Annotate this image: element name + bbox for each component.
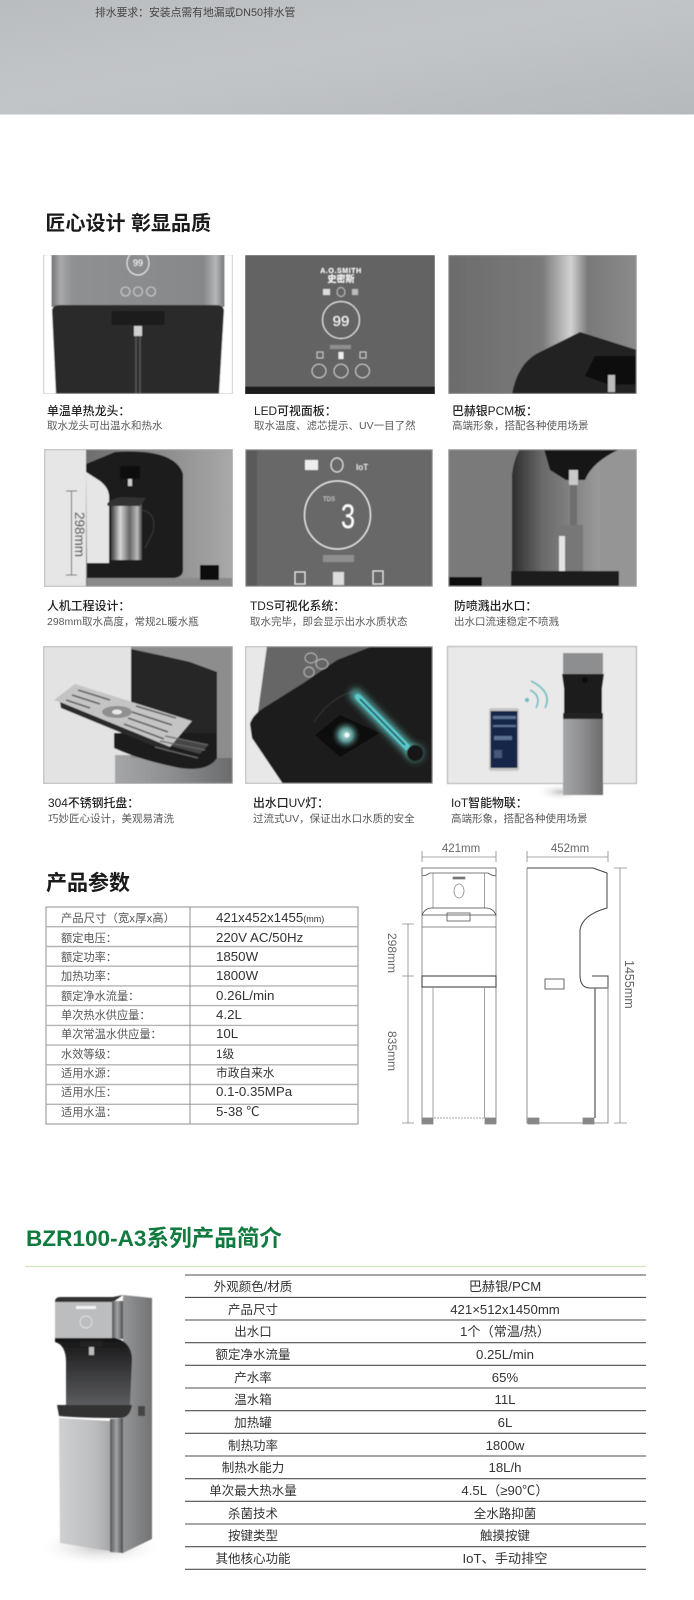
panel: LED display — [245, 255, 435, 394]
label: IoT: 高端形象，搭配各种使用场景 — [451, 812, 588, 825]
table: product parameters: 0.1-0.35MPa — [216, 1084, 293, 1099]
table: product parameters: 0.26L/min — [216, 988, 274, 1003]
label: ergonomic design: 298mm取水高度，常规2L暖水瓶 — [47, 615, 199, 628]
label: ergonomic design: 人机工程设计： — [47, 599, 130, 613]
table: series specifications: 制热水能力 — [222, 1461, 284, 1475]
table: product parameters: 4.2L — [216, 1007, 242, 1022]
table: product parameters: 1850W — [216, 949, 259, 964]
panel: TDS display: 3 — [341, 498, 355, 536]
table: product parameters — [46, 907, 358, 1124]
table: series specifications: 其他核心功能 — [215, 1552, 291, 1566]
label: faucet — [47, 404, 163, 432]
table: series specifications: 外观颜色/材质 — [214, 1279, 292, 1294]
table: product parameters: 适用水源： — [61, 1066, 117, 1080]
label: PCM silver: 巴赫银PCM板： — [452, 404, 538, 418]
panel: splash-proof outlet — [448, 449, 637, 587]
table: series specifications: 制热功率 — [228, 1438, 278, 1453]
table: product parameters: 产品尺寸（宽x厚x高） — [61, 911, 175, 925]
table: product parameters: 适用水温： — [61, 1106, 117, 1119]
label: UV lamp — [253, 796, 415, 825]
diagram: front view with dimensions: 421mm — [442, 843, 480, 855]
panel: faucet — [43, 251, 233, 394]
table: product parameters: 421x452x1455(mm) — [216, 910, 324, 925]
table: product parameters: 10L — [216, 1026, 238, 1041]
label: TDS display: TDS可视化系统： — [250, 599, 345, 613]
panel: LED display: 99 — [333, 313, 349, 330]
table: series specifications: 产品尺寸 — [228, 1303, 278, 1317]
green divider — [25, 1266, 646, 1268]
top banner with drainage requirement: 排水要求：安装点需有地漏或DN50排水管 — [95, 5, 296, 19]
table: series specifications: 6L — [498, 1415, 512, 1430]
heading: BZR100-A3 series: BZR100-A3系列产品简介 — [26, 1226, 282, 1251]
table: series specifications: 4.5L（≥90℃） — [461, 1483, 549, 1498]
table: series specifications: 65% — [492, 1370, 518, 1385]
label: UV lamp: 过流式UV，保证出水口水质的安全 — [253, 812, 415, 825]
label: splash-proof outlet — [454, 599, 559, 628]
table: series specifications: IoT、手动排空 — [462, 1551, 548, 1566]
panel: IoT — [448, 646, 636, 801]
table: product parameters: 适用水压： — [61, 1086, 117, 1099]
table: series specifications: 11L — [494, 1392, 516, 1407]
label: IoT — [451, 796, 588, 825]
table: series specifications: 1个（常温/热） — [460, 1324, 550, 1339]
diagram: front view with dimensions: 835mm — [385, 1031, 399, 1071]
label: faucet: 取水龙头可出温水和热水 — [47, 419, 163, 432]
panel: UV lamp — [245, 646, 433, 784]
table: product parameters: 1级 — [216, 1048, 235, 1061]
label: TDS display — [250, 599, 408, 628]
table: product parameters: 单次热水供应量： — [61, 1008, 151, 1022]
table: product parameters: 市政自来水 — [216, 1066, 275, 1080]
table: product parameters: 单次常温水供应量： — [61, 1027, 162, 1041]
label: TDS display: 取水完毕，即会显示出水水质状态 — [250, 615, 408, 628]
diagram: side view with dimensions — [527, 843, 636, 1124]
product image: water dispenser — [34, 1295, 166, 1567]
panel: ergonomic design — [44, 449, 233, 587]
diagram: front view with dimensions: 298mm — [385, 933, 399, 973]
label: stainless tray: 304不锈钢托盘： — [48, 796, 139, 810]
table: product parameters: 额定功率： — [61, 950, 117, 964]
label: splash-proof outlet: 防喷溅出水口： — [454, 599, 537, 613]
label: IoT: IoT智能物联： — [451, 796, 528, 810]
diagram: side view with dimensions: 1455mm — [622, 960, 636, 1009]
label: UV lamp: 出水口UV灯： — [253, 796, 329, 810]
label: PCM silver: 高端形象，搭配各种使用场景 — [452, 419, 588, 432]
table: series specifications: 421×512x1450mm — [450, 1302, 560, 1317]
diagram: front view with dimensions — [385, 843, 496, 1124]
table: product parameters: 5-38 ℃ — [216, 1104, 260, 1119]
table: product parameters: 额定净水流量： — [61, 989, 139, 1003]
panel: LED display: A.O.SMITH — [320, 268, 362, 275]
table: product parameters: 220V AC/50Hz — [216, 930, 303, 945]
panel: TDS display — [245, 449, 433, 587]
label: faucet: 单温单热龙头： — [47, 404, 130, 418]
table: product parameters: 水效等级： — [61, 1047, 117, 1061]
table: series specifications: 单次最大热水量 — [209, 1484, 297, 1498]
label: splash-proof outlet: 出水口流速稳定不喷溅 — [454, 615, 559, 628]
table: series specifications: 1800w — [486, 1438, 525, 1453]
panel: TDS display: IoT — [356, 462, 368, 472]
table: product parameters: 加热功率： — [61, 969, 117, 983]
panel: ergonomic design: 298mm — [72, 512, 87, 557]
label: LED display — [254, 404, 416, 432]
label: ergonomic design — [47, 599, 199, 628]
heading: product parameters: 产品参数 — [46, 871, 130, 895]
table: product parameters: 额定电压： — [61, 931, 117, 945]
table: series specifications: 0.25L/min — [476, 1347, 534, 1362]
table: series specifications: 温水箱 — [234, 1392, 272, 1407]
label: stainless tray — [48, 796, 174, 825]
table: series specifications: 巴赫银/PCM — [469, 1279, 541, 1294]
table: series specifications: 18L/h — [488, 1460, 522, 1475]
table: series specifications — [185, 1275, 646, 1569]
table: series specifications: 额定净水流量 — [215, 1347, 291, 1362]
table: series specifications: 产水率 — [234, 1370, 272, 1385]
label: PCM silver — [452, 404, 588, 432]
top banner with drainage requirement — [0, 0, 694, 114]
panel: faucet: 99 — [133, 258, 143, 268]
heading: craftsmanship design: 匠心设计 彰显品质 — [46, 212, 211, 235]
table: series specifications: 加热罐 — [234, 1416, 272, 1430]
diagram: side view with dimensions: 452mm — [551, 843, 589, 855]
table: series specifications: 杀菌技术 — [228, 1506, 278, 1521]
panel: TDS display: TDS — [323, 497, 335, 503]
panel: LED display: 史密斯 — [327, 273, 355, 284]
table: series specifications: 全水路抑菌 — [474, 1506, 536, 1521]
label: stainless tray: 巧妙匠心设计，美观易清洗 — [48, 812, 174, 825]
table: series specifications: 出水口 — [234, 1325, 272, 1339]
panel: PCM silver — [448, 255, 637, 394]
table: series specifications: 触摸按键 — [480, 1529, 530, 1543]
table: product parameters: 1800W — [216, 968, 259, 983]
label: LED display: LED可视面板： — [254, 404, 337, 418]
panel: stainless tray — [43, 646, 233, 784]
table: series specifications: 按键类型 — [228, 1529, 278, 1543]
label: LED display: 取水温度、滤芯提示、UV一目了然 — [254, 419, 416, 432]
